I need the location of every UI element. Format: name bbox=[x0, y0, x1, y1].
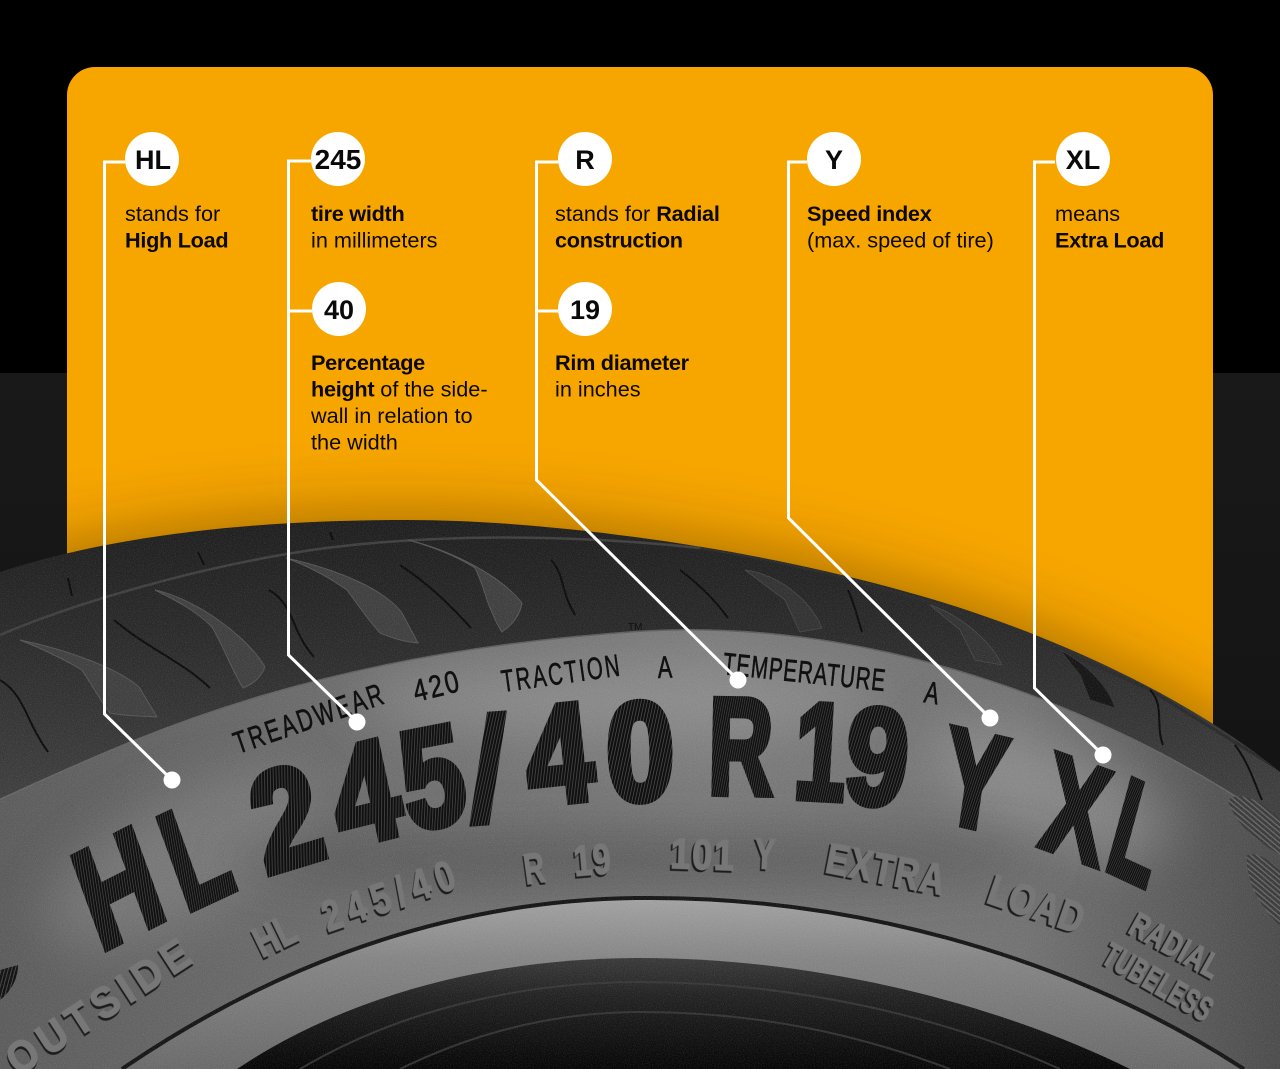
noise texture bbox=[0, 520, 1280, 1069]
embossed lower text line: 19 bbox=[572, 835, 614, 886]
embossed lower text line: HL bbox=[246, 906, 305, 967]
tire tread surface bbox=[0, 520, 1280, 1069]
description 19: in inches bbox=[555, 376, 641, 402]
XL bbox=[1033, 723, 1179, 917]
HL bbox=[56, 769, 249, 980]
callout: 40 bbox=[310, 282, 488, 454]
small molded text line bbox=[229, 622, 942, 761]
description R: stands for Radial bbox=[555, 201, 720, 226]
description 19: Rim diameter bbox=[555, 350, 690, 375]
callout: 245 bbox=[311, 132, 438, 252]
245/40: 5 bbox=[390, 694, 475, 860]
description XL: Extra Load bbox=[1055, 228, 1164, 252]
leader end dots bbox=[164, 672, 1112, 788]
badge R bbox=[558, 132, 612, 186]
245/40: / bbox=[472, 688, 504, 851]
embossed lower text line: LOAD bbox=[982, 866, 1091, 944]
Y: Y bbox=[934, 698, 1015, 862]
small molded text line: TREADWEAR bbox=[229, 676, 390, 761]
badge Y bbox=[807, 132, 861, 186]
small molded text line: TM bbox=[628, 622, 642, 633]
rim flange bbox=[122, 898, 1244, 1069]
background: dark lower band bbox=[0, 373, 1280, 1069]
badge 40 bbox=[312, 282, 366, 336]
embossed lower text line: Y bbox=[754, 829, 776, 878]
small molded text line: A bbox=[657, 650, 673, 685]
HL: L bbox=[142, 769, 249, 941]
description Y: (max. speed of tire) bbox=[807, 228, 994, 252]
description HL: High Load bbox=[125, 228, 228, 252]
description R: construction bbox=[555, 228, 683, 252]
description 40: the width bbox=[311, 430, 398, 454]
small molded text line: TRACTION bbox=[499, 647, 624, 699]
R: R bbox=[707, 669, 775, 824]
badge XL: XL bbox=[1066, 145, 1100, 175]
badge 245: 245 bbox=[315, 144, 361, 175]
sidewall bbox=[0, 630, 1280, 1069]
embossed lower text line: 101 bbox=[670, 830, 737, 880]
embossed lower text line bbox=[0, 829, 1227, 1069]
callout: R bbox=[555, 132, 720, 252]
description 40: Percentage bbox=[311, 350, 425, 375]
badge 40: 40 bbox=[324, 295, 354, 325]
245/40: 0 bbox=[605, 673, 676, 830]
HL: H bbox=[56, 796, 180, 980]
245/40 bbox=[235, 673, 676, 904]
callout: HL bbox=[125, 132, 228, 252]
callout: XL bbox=[1055, 132, 1164, 252]
badge HL: HL bbox=[135, 145, 171, 175]
callout: Y bbox=[807, 132, 994, 252]
embossed lower text line: RADIAL bbox=[1123, 906, 1227, 987]
main size code: HL 245/40 R 19 Y XL bbox=[56, 669, 1179, 980]
rim groove line bbox=[122, 898, 1244, 1069]
19: 1 bbox=[791, 673, 850, 830]
XL: L bbox=[1095, 749, 1179, 917]
description HL: stands for bbox=[125, 201, 220, 226]
badge 19: 19 bbox=[570, 295, 600, 325]
19 bbox=[791, 673, 915, 836]
description 40: of the side- bbox=[380, 376, 488, 402]
tire bbox=[0, 520, 1280, 1069]
245/40: 2 bbox=[235, 732, 337, 904]
245/40: 4 bbox=[517, 673, 600, 835]
callout: 19 bbox=[555, 282, 690, 402]
embossed lower text line: R bbox=[521, 843, 548, 893]
wheel well rings bbox=[300, 982, 1060, 1069]
tread details: ribs, blobs and sipes bbox=[0, 532, 1280, 827]
small molded text line: A bbox=[922, 675, 942, 711]
leader lines bbox=[104, 161, 1103, 780]
background: black upper band bbox=[0, 0, 1280, 373]
description XL: means bbox=[1055, 201, 1120, 226]
description 40: height bbox=[311, 376, 374, 402]
description 40: wall in relation to bbox=[310, 403, 473, 428]
small molded text line: 420 bbox=[409, 663, 465, 708]
sidewall light patches bbox=[19, 662, 1189, 983]
description 245: in millimeters bbox=[311, 228, 438, 252]
panel: yellow card with tire shadow bbox=[67, 67, 1213, 724]
description Y: Speed index bbox=[807, 201, 932, 226]
245/40: 4 bbox=[316, 708, 413, 878]
embossed lower text line: TUBELESS bbox=[1096, 936, 1220, 1030]
badge Y: Y bbox=[825, 145, 843, 175]
badge R: R bbox=[575, 145, 595, 175]
19: 9 bbox=[839, 678, 915, 836]
embossed lower text line: 245/40 bbox=[316, 849, 468, 941]
hatched sidewall ovals bbox=[0, 796, 1280, 1000]
inner wheel well bbox=[237, 958, 1130, 1069]
XL: X bbox=[1033, 723, 1119, 895]
description 245: tire width bbox=[311, 201, 404, 226]
small molded text line: TEMPERATURE bbox=[721, 646, 888, 698]
embossed lower text line: EXTRA bbox=[822, 835, 950, 905]
